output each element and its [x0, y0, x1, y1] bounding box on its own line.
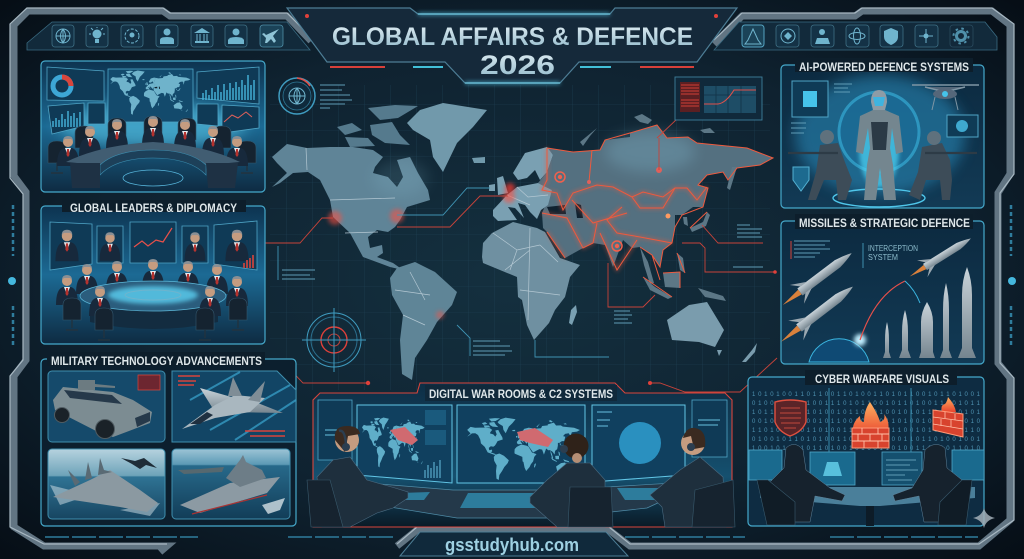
top icon bar: right — [714, 22, 997, 50]
curved summit table — [66, 142, 240, 188]
small shield — [793, 167, 809, 191]
binary rain: 1 0 0 1 0 1 1 0 1 0 1 1 0 1 0 0 1 0 1 0 0 1 1 0 1 0 0 1 1 0 0 1 0 1 1 0 1 0 — [752, 446, 981, 452]
panel: missiles and strategic defence — [773, 214, 984, 364]
icon: light bulb — [86, 25, 108, 47]
map connector lines — [258, 85, 777, 392]
heading: DIGITAL WAR ROOMS & C2 SYSTEMS — [429, 387, 613, 401]
heading: GLOBAL LEADERS & DIPLOMACY — [70, 201, 237, 215]
icon: tilted firewall — [933, 397, 963, 437]
panel: cyber warfare visuals — [748, 370, 995, 528]
tile: armoured vehicle — [48, 371, 165, 442]
data text lines — [282, 85, 763, 355]
foreground delegates — [63, 286, 247, 340]
icon: government building — [191, 25, 213, 47]
standing missiles — [883, 267, 976, 358]
map grid — [270, 85, 770, 390]
top icon bar: left — [27, 22, 310, 50]
icon: firewall with flame — [852, 402, 889, 448]
title banner — [287, 8, 737, 83]
tile: stealth fighter — [172, 371, 296, 442]
icon: jet — [260, 25, 283, 47]
binary rain: 0 1 0 0 1 1 0 1 0 1 0 0 1 1 1 0 1 0 1 1 0 0 1 0 1 1 0 1 0 0 1 1 0 0 1 0 1 1 — [752, 401, 981, 407]
panel: leaders summit — [41, 61, 265, 192]
conflict borders — [542, 125, 773, 297]
data screen — [947, 115, 978, 137]
binary rain: 1 1 0 1 0 0 1 0 0 1 1 0 1 0 0 1 1 0 1 0 0 1 0 1 1 0 0 1 0 1 0 0 1 1 0 1 1 0 — [752, 428, 981, 434]
heading: MISSILES & STRATEGIC DEFENCE — [799, 216, 970, 230]
operator left — [307, 426, 408, 527]
flying missiles — [773, 230, 976, 352]
tile: stealth warship — [48, 449, 165, 519]
icon: shield — [880, 25, 903, 47]
heading: MILITARY TECHNOLOGY ADVANCEMENTS — [51, 354, 262, 368]
hot spots — [328, 167, 670, 319]
icon: globe — [52, 25, 74, 47]
drone — [912, 85, 979, 110]
icon: red shield — [775, 400, 806, 436]
operator centre — [530, 434, 613, 527]
icon: settings gear — [950, 25, 973, 47]
website text: gsstudyhub.com — [445, 535, 579, 555]
portrait screens — [50, 221, 257, 270]
war room desk — [367, 483, 673, 518]
heading: AI-POWERED DEFENCE SYSTEMS — [799, 60, 969, 74]
tile: destroyer — [172, 449, 290, 519]
red data chart widget — [675, 77, 762, 120]
icon: network of people — [811, 25, 834, 47]
world map — [272, 103, 773, 380]
icon: eye target — [776, 25, 799, 47]
interception label: SYSTEM — [868, 253, 898, 262]
kneeling soldier left — [788, 130, 852, 200]
operator right — [650, 428, 735, 527]
binary rain: 0 1 0 0 1 0 1 1 0 1 0 1 0 0 1 1 0 1 0 1 1 0 1 0 0 1 1 0 1 1 0 1 0 0 1 0 0 1 — [752, 437, 981, 443]
interception label — [791, 241, 918, 268]
binary rain — [752, 392, 981, 452]
title text: GLOBAL AFFAIRS & DEFENCE — [332, 23, 693, 51]
hacker monitors — [749, 450, 984, 485]
hacker desk — [760, 487, 975, 526]
earth horizon — [809, 281, 920, 362]
binary rain: 0 0 1 0 1 1 0 1 1 0 0 1 0 1 1 0 0 1 0 1 1 0 1 1 0 1 0 0 1 0 1 1 0 1 0 0 1 0 — [752, 419, 981, 425]
central android — [833, 90, 925, 207]
panel: digital war rooms and C2 systems — [307, 383, 735, 527]
icon: officer — [156, 25, 178, 47]
sparkle mark — [973, 508, 995, 528]
war room wall screens — [318, 400, 727, 483]
icon: node network — [915, 25, 938, 47]
AI chip — [791, 81, 852, 133]
binary rain: 1 0 1 1 0 0 1 0 1 1 0 1 0 0 1 0 1 1 0 1 0 1 0 0 1 0 1 0 1 1 0 0 1 1 0 1 0 1 — [752, 410, 981, 416]
summit delegates — [48, 116, 256, 173]
side indicator dots — [8, 205, 1016, 345]
interception label: INTERCEPTION — [868, 244, 918, 253]
target reticle — [302, 308, 366, 372]
icon: atom — [846, 25, 869, 47]
panel: military technology advancements — [41, 352, 296, 526]
round table — [80, 281, 226, 329]
panel: global leaders and diplomacy — [41, 200, 265, 344]
summit screens — [47, 67, 259, 134]
status bars — [330, 66, 694, 68]
kneeling soldier right — [909, 131, 977, 200]
hooded hacker right — [893, 444, 972, 525]
website footer — [45, 532, 978, 556]
icon: gear with person — [121, 25, 143, 47]
hooded hacker left — [757, 444, 845, 525]
heading: CYBER WARFARE VISUALS — [815, 372, 949, 386]
title year: 2026 — [480, 50, 555, 80]
icon: alert tower — [742, 25, 764, 47]
round table delegates — [56, 259, 248, 306]
binary rain: 1 0 1 0 1 0 0 1 1 0 1 1 0 0 1 1 0 1 0 0 1 1 0 1 0 1 1 0 0 1 0 1 1 0 1 0 0 1 — [752, 392, 981, 398]
panel: AI-powered defence systems — [781, 58, 984, 208]
icon: leader — [225, 25, 247, 47]
globe radar widget — [279, 78, 315, 114]
country borders — [306, 148, 560, 325]
